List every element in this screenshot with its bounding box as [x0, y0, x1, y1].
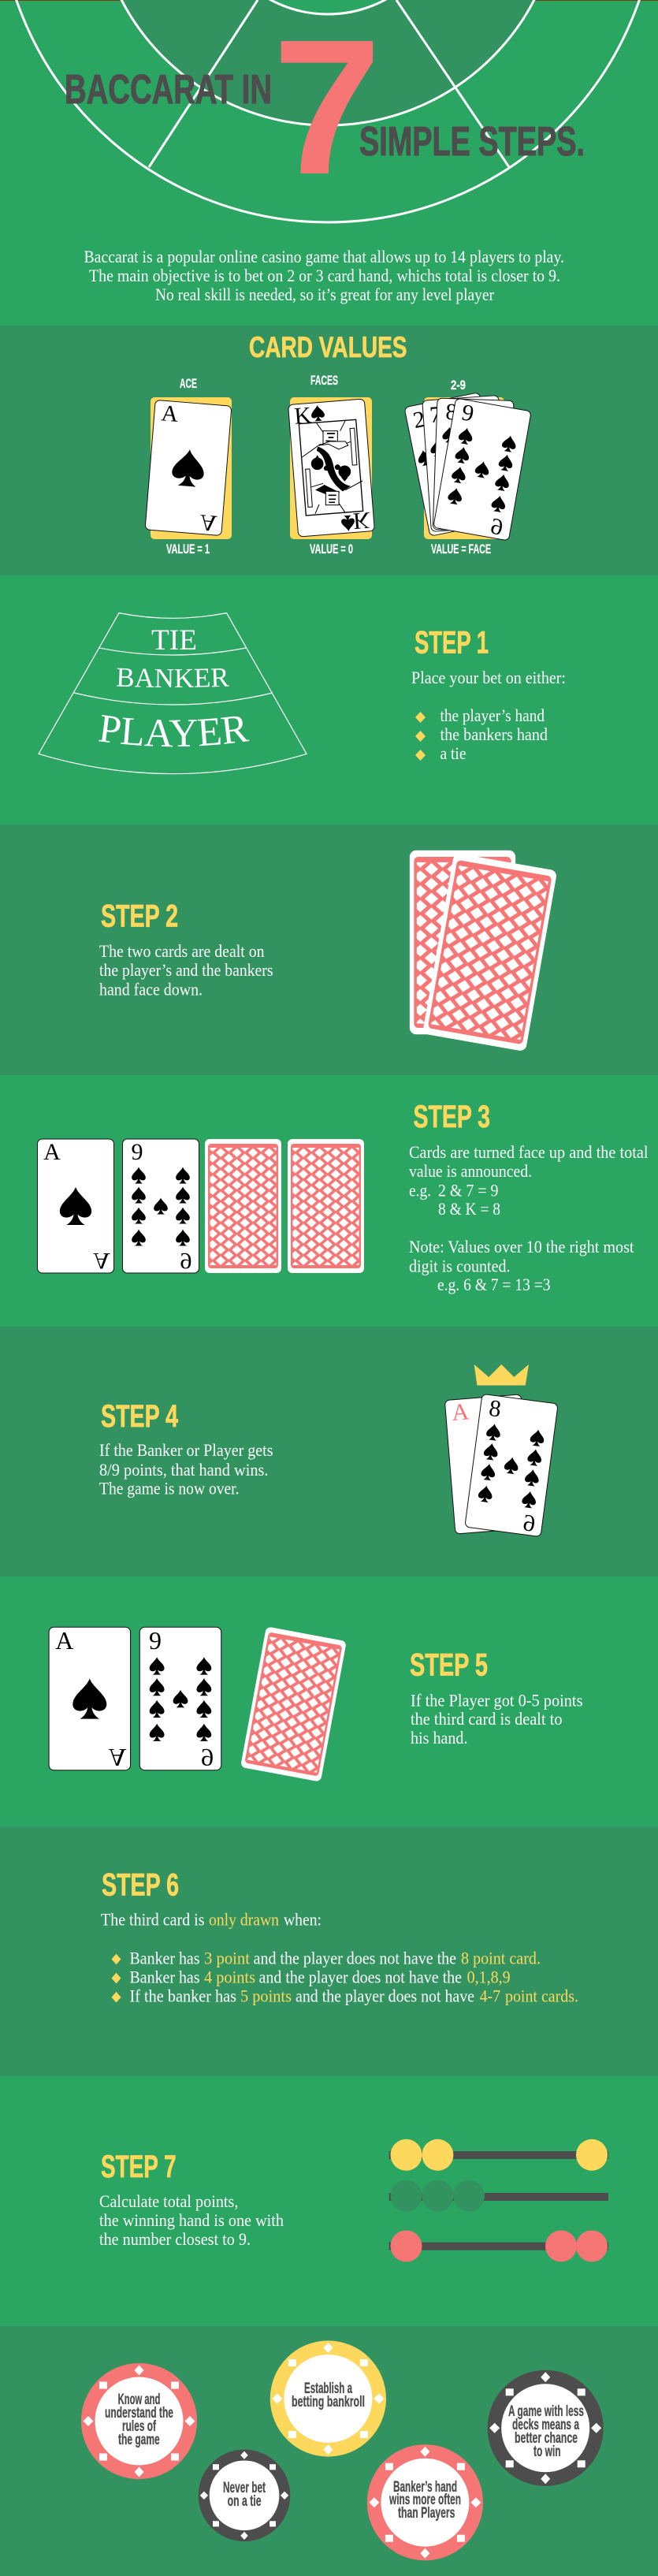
dealt cards row [38, 1139, 364, 1274]
title: baccarat in: BACCARAT IN [65, 67, 272, 113]
label: value = 1: VALUE = 1 [166, 542, 210, 557]
card: 7: 7 [429, 402, 442, 428]
heading: step 5: STEP 5 [410, 1648, 488, 1683]
king artwork [299, 419, 363, 516]
abacus row: green [389, 2180, 608, 2212]
chip: fewer decks: decks means a [512, 2417, 579, 2433]
step 7 text [99, 2191, 284, 2249]
intro text: The main objective is to bet on 2 or 3 card hand, whichs total is closer to 9. [89, 266, 560, 285]
step 5 text [411, 1690, 583, 1748]
panel: tips chips [0, 2326, 658, 2576]
card: 8: 8 [445, 400, 458, 425]
intro text: Baccarat is a popular online casino game that allows up to 14 players to play. [84, 247, 564, 266]
abacus row: coral [389, 2231, 608, 2262]
label: faces: FACES [310, 373, 338, 388]
chip: know the rules [81, 2363, 197, 2479]
title: big 7: 7 [273, 0, 381, 214]
step 3 text: value is announced. [409, 1161, 532, 1181]
chip: establish a bankroll [270, 2340, 386, 2457]
card: face down 2 [288, 1139, 364, 1273]
card: ace of spades: A [160, 401, 180, 427]
card: 9: 9 [131, 1139, 143, 1165]
chip: banker wins more: wins more often [388, 2492, 461, 2508]
step 3 text: digit is counted. [409, 1256, 511, 1275]
step 5 text: his hand. [411, 1728, 468, 1748]
chip: fewer decks: A game with less [508, 2403, 584, 2420]
card: 9 [433, 398, 531, 541]
roulette table arcs [0, 0, 657, 222]
step 6 bullet list: 0,1,8,9 [467, 1967, 511, 1987]
card: red ace: A [451, 1398, 470, 1426]
step 6 bullet list: and the player does not have [296, 1986, 474, 2005]
heading: card values: CARD VALUES [249, 331, 407, 363]
betting table diagram [38, 612, 307, 774]
step 6 bullet list: Banker has [129, 1967, 200, 1987]
yellow card backing: numbers [424, 397, 504, 539]
chip: establish a bankroll: betting bankroll [292, 2394, 365, 2410]
step 5 text: If the Player got 0-5 points [411, 1690, 583, 1711]
step 6 bullet list: 8 point card. [461, 1949, 541, 1967]
icon: crown [474, 1364, 529, 1386]
step 5 text: the third card is dealt to [411, 1709, 563, 1729]
chip: know the rules: Know and [118, 2392, 160, 2408]
step 6 bullet list: 5 points [240, 1986, 292, 2005]
step 3 text: e.g. [409, 1181, 431, 1200]
card: 9: 9 [489, 513, 505, 539]
card: ace: A [93, 1248, 110, 1274]
step 2 text: hand face down. [99, 979, 203, 1000]
card: ace of spades [145, 400, 232, 536]
panel: step 4 [0, 1327, 658, 1576]
step 6 bullet list: point cards. [505, 1986, 578, 2005]
chip: never bet on a tie [199, 2450, 290, 2541]
heading: step 4: STEP 4 [101, 1399, 179, 1434]
card: king of spades: K [352, 507, 371, 534]
step 3 text: Note: Values over 10 the right most [409, 1237, 634, 1256]
chip: banker wins more: Banker’s hand [393, 2479, 457, 2496]
betting table diagram: BANKER [117, 668, 229, 687]
card: 9: 9 [459, 400, 476, 426]
card: ace of spades: A [199, 509, 218, 535]
panel: card values [0, 326, 658, 575]
chip: fewer decks [488, 2370, 604, 2486]
step 1 bullet list [415, 705, 548, 763]
label: value = 0: VALUE = 0 [310, 542, 353, 557]
chip: establish a bankroll: Establish a [304, 2381, 352, 2397]
step 6 bullet list: 3 point [204, 1949, 250, 1967]
card: 9: 9 [201, 1744, 214, 1772]
step 1 bullet list: the player’s hand [440, 705, 545, 725]
card: 9 [139, 1626, 221, 1772]
card: 9: 9 [149, 1626, 162, 1655]
betting table diagram: TIE [151, 624, 197, 657]
card: king of spades [288, 399, 374, 537]
label: 2-9: 2-9 [451, 378, 466, 393]
card: 8 [465, 1394, 558, 1538]
chip: banker wins more [367, 2444, 483, 2560]
step 2 text: The two cards are dealt on [99, 941, 265, 961]
chip: never bet on a tie: on a tie [228, 2493, 262, 2510]
panel: step 5 [49, 1626, 583, 1782]
step 3 text [409, 1142, 648, 1294]
card: face down 1 [205, 1139, 281, 1273]
winning cards [444, 1394, 558, 1538]
card: ace: A [43, 1139, 61, 1165]
card: ace: A [108, 1744, 127, 1772]
card: ace [49, 1626, 131, 1772]
card: king of spades: K [293, 402, 313, 430]
heading: step 6: STEP 6 [102, 1867, 179, 1902]
step 7 text: the number closest to 9. [99, 2229, 251, 2249]
top edge strip [0, 0, 658, 1]
face-down cards [410, 851, 557, 1052]
heading: step 2: STEP 2 [101, 899, 178, 933]
label: ace: ACE [180, 376, 197, 391]
step 4 text: If the Banker or Player gets [99, 1440, 273, 1460]
panel: header [0, 0, 658, 304]
step 6 bullet list [112, 1949, 578, 2005]
step 6 lead text: The third card is [101, 1909, 205, 1930]
step 3 text: e.g. 6 & 7 = 13 =3 [437, 1275, 550, 1294]
step 6 lead text: when: [284, 1909, 322, 1930]
chip: know the rules: understand the [105, 2405, 173, 2422]
card: red ace [444, 1394, 532, 1534]
yellow card backing: ace [151, 397, 232, 539]
chip: fewer decks: better chance [515, 2430, 578, 2447]
step 7 text: the winning hand is one with [99, 2210, 284, 2230]
chip: know the rules: the game [118, 2432, 160, 2448]
yellow card backing: faces [290, 397, 372, 539]
step 6 lead text [101, 1909, 322, 1930]
abacus score tracker [389, 2139, 608, 2262]
card: ace [38, 1139, 113, 1274]
step 4 text: 8/9 points, that hand wins. [99, 1460, 268, 1480]
step 6 bullet list: 4 points [204, 1967, 255, 1987]
step 6 lead text: only drawn [209, 1909, 279, 1930]
panel: step 1 [38, 612, 566, 774]
step 1 bullet list: a tie [440, 743, 467, 763]
step 6 bullet list: If the banker has [129, 1986, 236, 2005]
panel: step 7 [99, 2139, 608, 2262]
panel: step 2 [0, 825, 658, 1075]
heading: step 1: STEP 1 [415, 626, 489, 661]
step 2 text: the player’s and the bankers [99, 960, 273, 980]
card: 7 [422, 396, 507, 531]
intro text: No real skill is needed, so it’s great for any level player [155, 285, 495, 304]
label: value = face: VALUE = FACE [431, 542, 491, 557]
panel: step 3 [38, 1100, 648, 1294]
card: ace: A [55, 1626, 73, 1655]
card fan: 2 to 9 [404, 393, 531, 541]
card: third card face down [240, 1626, 347, 1782]
step 1 text: Place your bet on either: [411, 668, 566, 687]
intro text [84, 247, 564, 304]
step 2 text [99, 941, 273, 1000]
card: 8: 9 [522, 1509, 537, 1536]
step 4 text: The game is now over. [99, 1479, 240, 1498]
step 6 bullet list: and the player does not have the [258, 1967, 462, 1987]
chip: fewer decks: to win [533, 2444, 561, 2460]
card: 9: 9 [180, 1248, 192, 1274]
chip: know the rules: rules of [122, 2418, 156, 2435]
heading: step 3: STEP 3 [413, 1100, 490, 1134]
heading: step 7: STEP 7 [101, 2150, 177, 2184]
card: 8 [433, 398, 514, 532]
step 3 text: 8 & K = 8 [438, 1199, 500, 1219]
step 6 bullet list: Banker has [129, 1949, 200, 1967]
card: 8: 8 [488, 1395, 503, 1423]
step 7 text: Calculate total points, [99, 2191, 238, 2211]
step 3 text: 2 & 7 = 9 [438, 1181, 498, 1200]
card: 2: 2 [411, 407, 428, 434]
step 1 bullet list: the bankers hand [440, 724, 548, 744]
step 6 bullet list: 4-7 [480, 1986, 500, 2005]
panel: step 6 [0, 1827, 658, 2076]
step 4 text [99, 1440, 273, 1498]
betting table diagram: PLAYER [99, 715, 249, 747]
step 6 bullet list: and the player does not have the [254, 1949, 456, 1967]
chip: never bet on a tie: Never bet [223, 2480, 266, 2496]
abacus row: yellow [389, 2139, 608, 2171]
chip: banker wins more: than Players [398, 2505, 455, 2522]
card: 9 [123, 1139, 199, 1274]
card: 2 [404, 393, 505, 536]
